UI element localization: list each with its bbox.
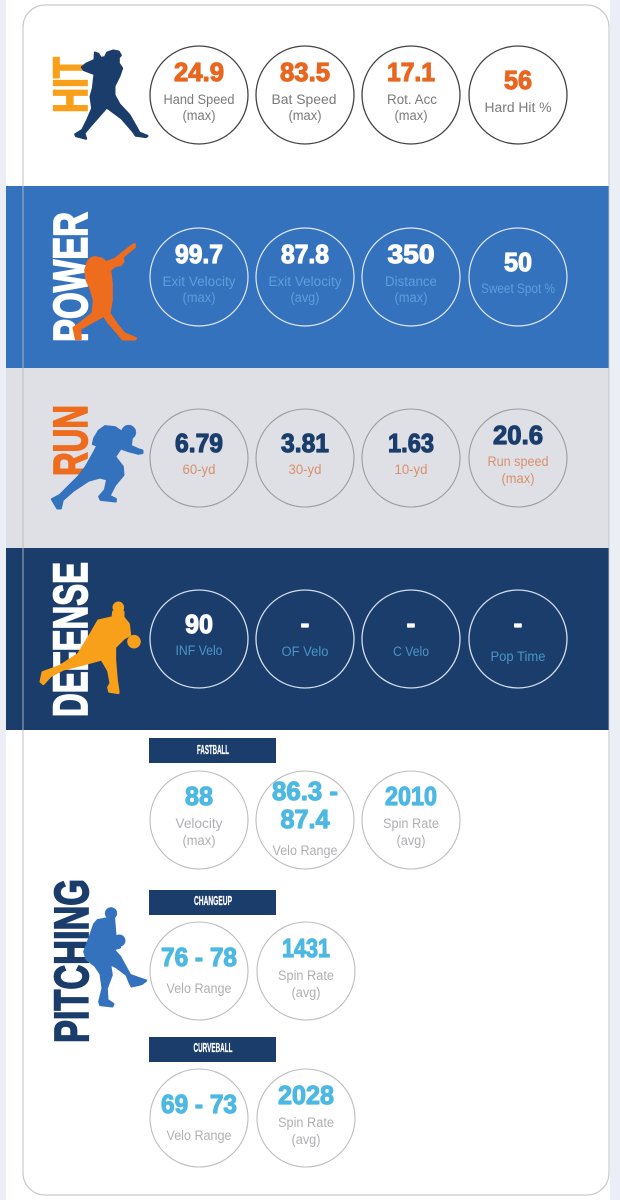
heading: POWER: POWER bbox=[45, 212, 98, 342]
stat: fastball velo range: 86.3 - bbox=[272, 776, 338, 806]
stat: 10 yard: 1.63 bbox=[388, 428, 434, 458]
stat: sweet spot percent: Sweet Spot % bbox=[481, 281, 555, 296]
stat: bat speed: (max) bbox=[288, 108, 322, 123]
stat: curveball velo range: Velo Range bbox=[166, 1128, 232, 1143]
stat: distance: (max) bbox=[394, 290, 428, 305]
icon: batter silhouette bbox=[75, 51, 147, 139]
label: changeup bbox=[149, 890, 276, 915]
stat: rotational acceleration: Rot. Acc bbox=[387, 92, 437, 107]
stat: curveball spin rate: 2028 bbox=[278, 1080, 334, 1110]
stat: changeup spin rate: (avg) bbox=[292, 985, 320, 1000]
stat: fastball velo range bbox=[256, 771, 354, 869]
stat: pop time bbox=[469, 590, 567, 688]
stat: pop time: Pop Time bbox=[490, 649, 546, 664]
stat: exit velocity max: 99.7 bbox=[175, 239, 223, 269]
stat: 10 yard bbox=[362, 409, 460, 507]
panel: hit bbox=[45, 46, 567, 144]
label: fastball bbox=[149, 738, 276, 763]
stat: fastball velocity: 88 bbox=[185, 781, 213, 811]
stat: infield velocity: 90 bbox=[185, 609, 213, 639]
stat: rotational acceleration bbox=[362, 46, 460, 144]
stat: exit velocity average: Exit Velocity bbox=[268, 274, 342, 289]
stat: pop time: - bbox=[514, 608, 522, 638]
stat: run speed: 20.6 bbox=[493, 420, 543, 450]
stat: hard hit percent: 56 bbox=[504, 65, 532, 95]
stat: fastball velo range: 87.4 bbox=[280, 804, 330, 834]
stat: fastball velo range: Velo Range bbox=[272, 843, 338, 858]
stat: run speed: Run speed bbox=[488, 454, 548, 469]
stat: sweet spot percent bbox=[469, 228, 567, 326]
stat: hand speed: Hand Speed bbox=[164, 92, 234, 107]
panel: power bbox=[6, 186, 609, 368]
band: power background bbox=[6, 186, 609, 368]
stat: outfield velocity bbox=[256, 590, 354, 688]
heading: PITCHING: PITCHING bbox=[46, 879, 99, 1043]
stat: run speed: (max) bbox=[502, 471, 534, 486]
label: curveball bbox=[149, 1037, 276, 1062]
stat: changeup velo range: 76 - 78 bbox=[161, 942, 237, 972]
stat: exit velocity max: (max) bbox=[182, 290, 216, 305]
stat: exit velocity max: Exit Velocity bbox=[162, 274, 236, 289]
panel: defense bbox=[6, 548, 609, 730]
label: changeup: CHANGEUP bbox=[194, 893, 232, 908]
stat: exit velocity average: 87.8 bbox=[281, 239, 329, 269]
stat: hand speed: (max) bbox=[182, 108, 216, 123]
stat: bat speed: 83.5 bbox=[280, 57, 330, 87]
stat: catcher velocity: - bbox=[407, 608, 415, 638]
stat: fastball velocity: Velocity bbox=[176, 816, 223, 831]
stat: sweet spot percent: 50 bbox=[504, 247, 532, 277]
band: run background bbox=[6, 368, 609, 548]
stat: curveball velo range: 69 - 73 bbox=[161, 1089, 237, 1119]
stat: distance: 350 bbox=[388, 239, 434, 269]
panel: run bbox=[6, 368, 609, 548]
stat: catcher velocity: C Velo bbox=[393, 644, 429, 659]
icon: runner silhouette bbox=[52, 425, 142, 508]
icon: pitcher silhouette bbox=[84, 907, 146, 1006]
stat: catcher velocity bbox=[362, 590, 460, 688]
stat: 60 yard: 60-yd bbox=[182, 462, 216, 477]
stat: changeup spin rate: 1431 bbox=[282, 933, 330, 963]
stat: bat speed bbox=[256, 46, 354, 144]
stat: curveball spin rate: Spin Rate bbox=[278, 1115, 334, 1130]
stat: outfield velocity: - bbox=[301, 608, 309, 638]
stat: distance bbox=[362, 228, 460, 326]
heading: DEFENSE: DEFENSE bbox=[45, 562, 98, 717]
label: fastball: FASTBALL bbox=[197, 742, 229, 757]
stat: infield velocity bbox=[150, 590, 248, 688]
stat: hand speed: 24.9 bbox=[174, 57, 224, 87]
stat: distance: Distance bbox=[385, 274, 437, 289]
stat: 30 yard: 30-yd bbox=[288, 462, 322, 477]
stat: exit velocity average: (avg) bbox=[290, 290, 320, 305]
stat: outfield velocity: OF Velo bbox=[282, 644, 328, 659]
stat: hard hit percent bbox=[469, 46, 567, 144]
stat: changeup velo range bbox=[150, 922, 248, 1020]
stat: 30 yard: 3.81 bbox=[281, 428, 329, 458]
stat: fastball spin rate bbox=[362, 771, 460, 869]
stat: hard hit percent: Hard Hit % bbox=[484, 100, 552, 115]
stat: fastball velocity: (max) bbox=[182, 833, 216, 848]
stat: rotational acceleration: 17.1 bbox=[387, 57, 435, 87]
stat: fastball spin rate: (avg) bbox=[396, 833, 426, 848]
stat: curveball velo range bbox=[150, 1069, 248, 1167]
stat: rotational acceleration: (max) bbox=[394, 108, 428, 123]
stat: infield velocity: INF Velo bbox=[176, 643, 222, 658]
band: defense background bbox=[6, 548, 609, 730]
stat: 60 yard: 6.79 bbox=[175, 428, 223, 458]
stat: 10 yard: 10-yd bbox=[394, 462, 428, 477]
stat: exit velocity average bbox=[256, 228, 354, 326]
icon: power hitter silhouette bbox=[74, 244, 136, 339]
stat: exit velocity max bbox=[150, 228, 248, 326]
stat: run speed bbox=[469, 409, 567, 507]
stat: fastball spin rate: Spin Rate bbox=[383, 816, 439, 831]
label: curveball: CURVEBALL bbox=[194, 1040, 233, 1055]
stat: changeup spin rate bbox=[257, 922, 355, 1020]
stat: 30 yard bbox=[256, 409, 354, 507]
stat: hand speed bbox=[150, 46, 248, 144]
stat: changeup spin rate: Spin Rate bbox=[278, 968, 334, 983]
stat: fastball velocity bbox=[150, 771, 248, 869]
stat: curveball spin rate: (avg) bbox=[292, 1132, 320, 1147]
panel: pitching bbox=[46, 738, 460, 1167]
stat: bat speed: Bat Speed bbox=[272, 92, 336, 107]
stat: changeup velo range: Velo Range bbox=[166, 981, 232, 996]
stat: 60 yard bbox=[150, 409, 248, 507]
stat: curveball spin rate bbox=[257, 1069, 355, 1167]
stat: fastball spin rate: 2010 bbox=[385, 781, 437, 811]
heading: RUN: RUN bbox=[45, 405, 98, 476]
heading: HIT: HIT bbox=[45, 57, 98, 113]
icon: fielder silhouette bbox=[41, 602, 141, 693]
